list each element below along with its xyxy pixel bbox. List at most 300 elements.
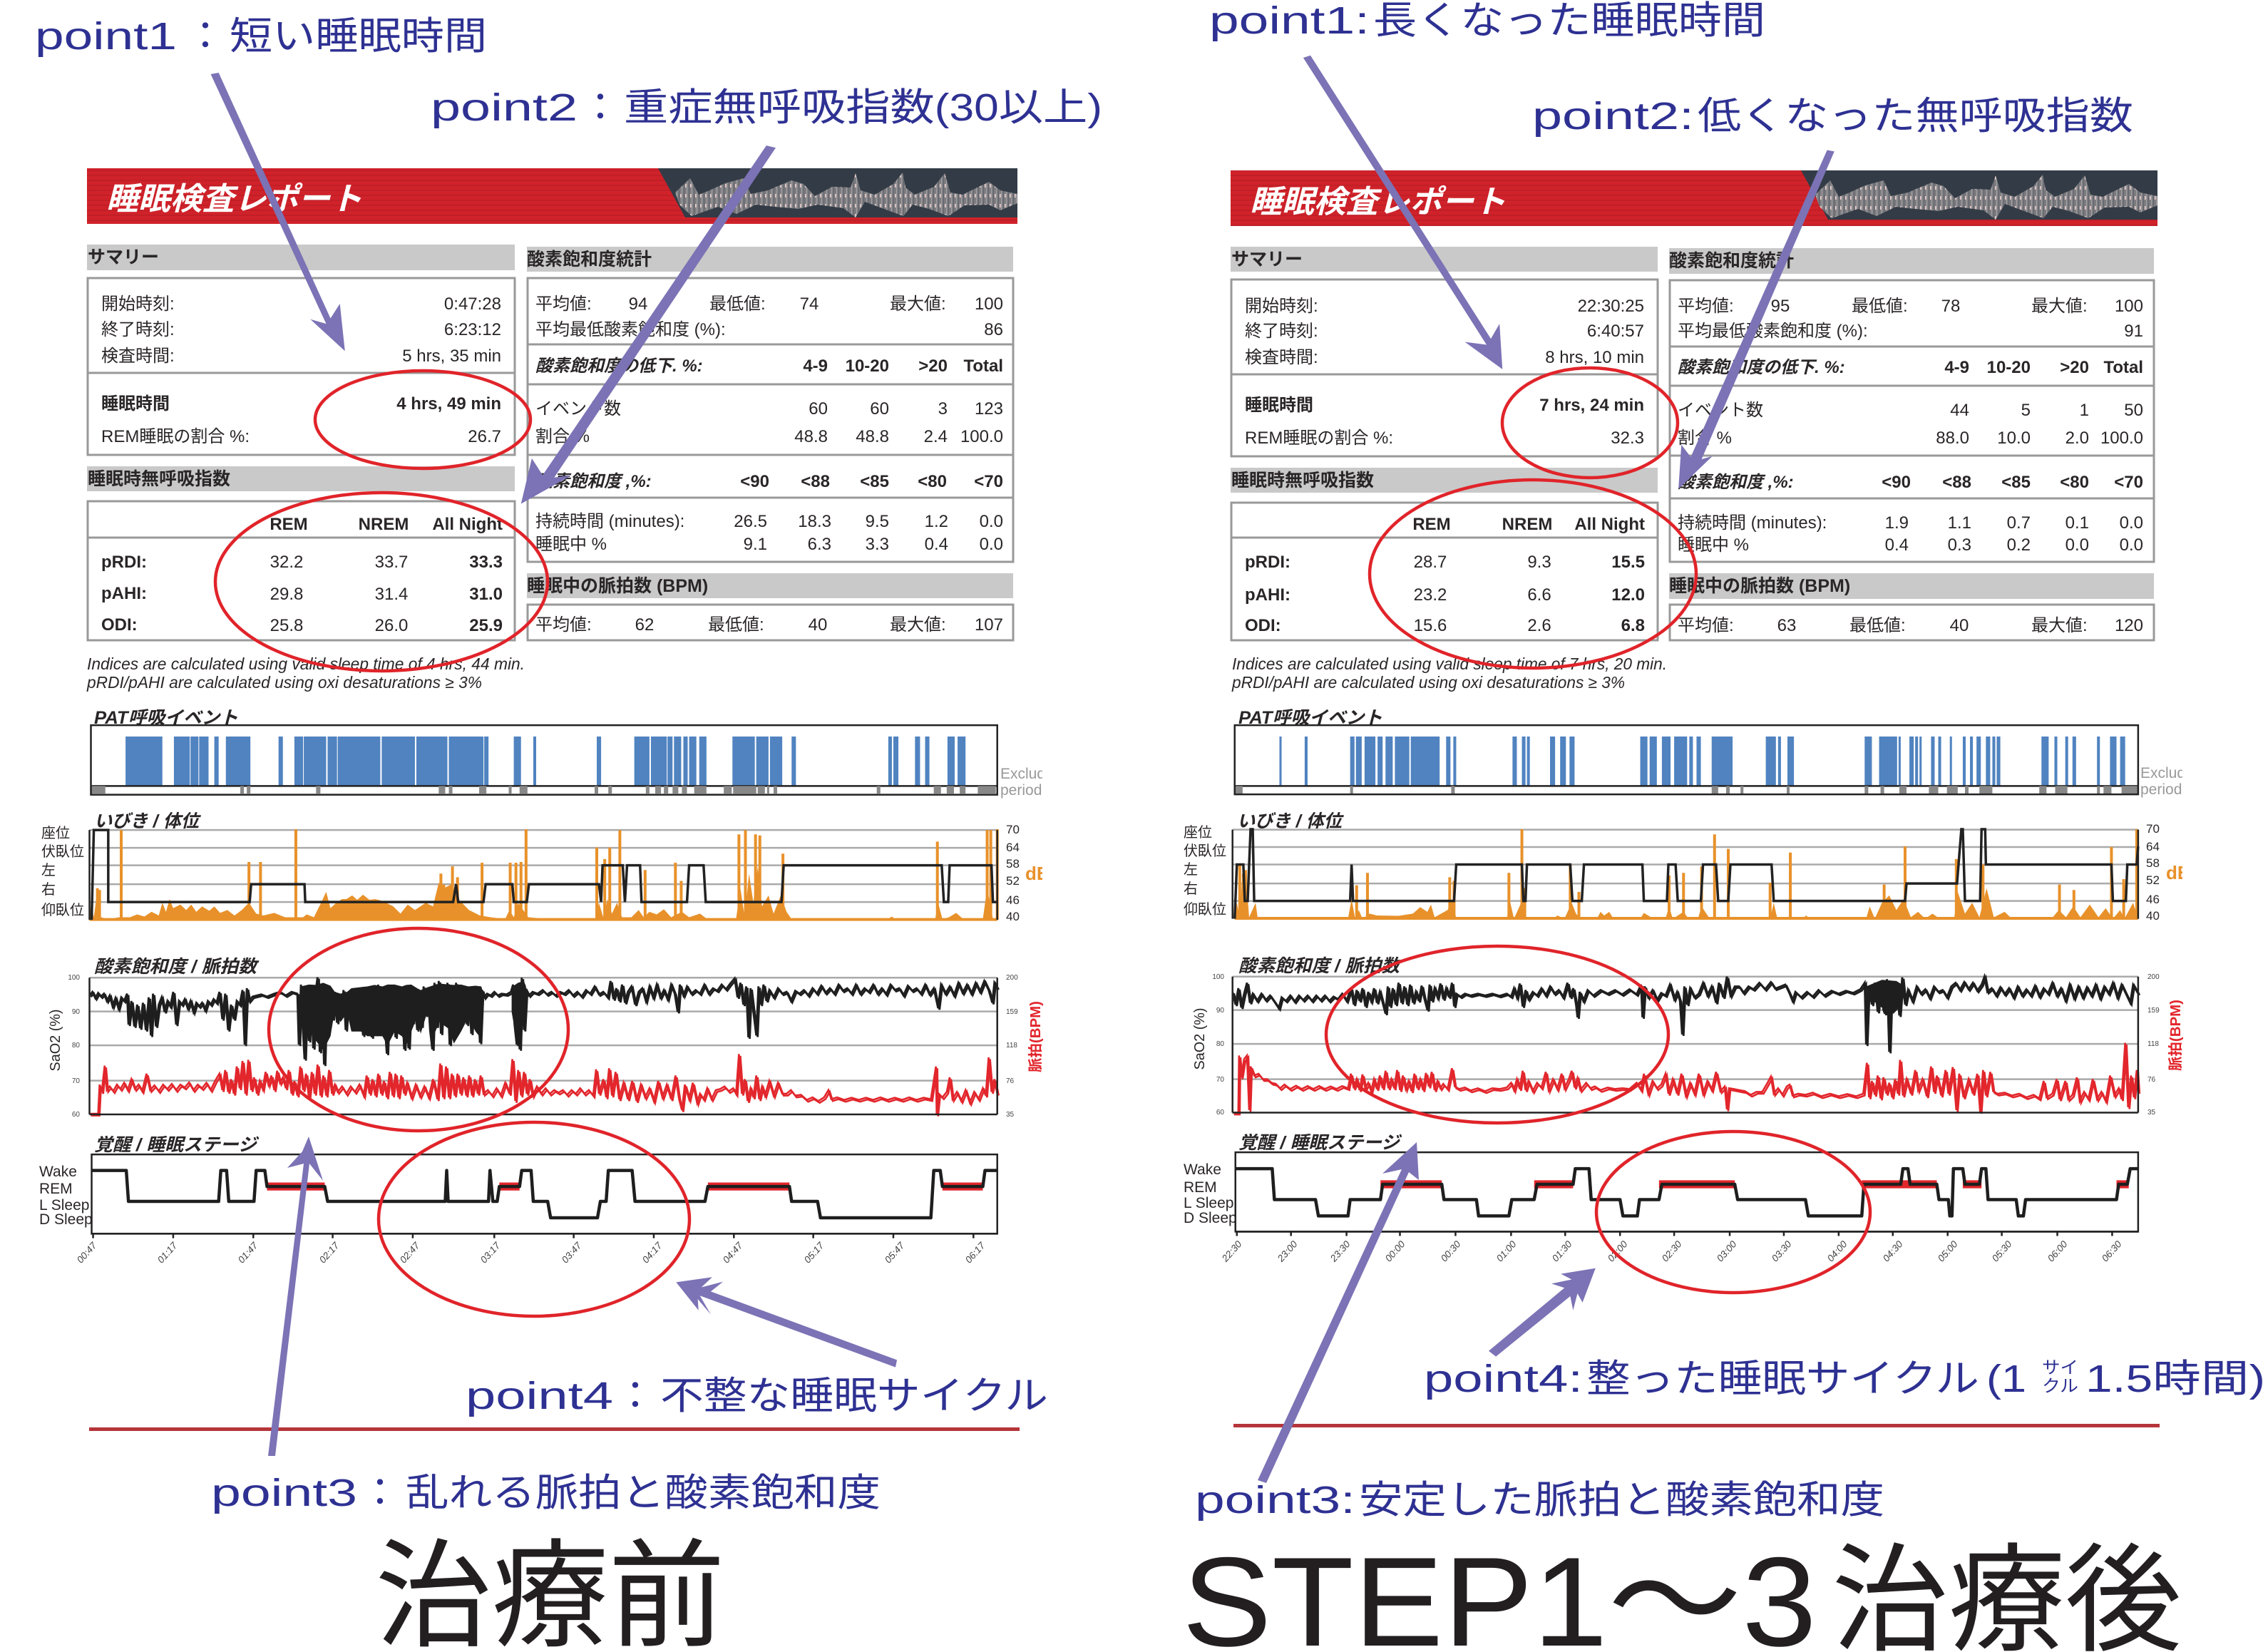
panel: oxygen saturation statistics: 3.3 [866, 535, 889, 554]
panel: oxygen saturation statistics: イベント数 [1678, 401, 1763, 420]
text block: calculation notes: pRDI/pAHI are calculated using oxi desaturations ≥ 3% [1231, 673, 1625, 692]
panel: oxygen saturation statistics: 100 [975, 294, 1003, 314]
chart: oxygen saturation and pulse: 90 [72, 1008, 80, 1016]
panel: apnea index: 31.4 [375, 585, 408, 604]
arrow: left point 4 [676, 1277, 897, 1368]
panel: oxygen saturation statistics: 1.2 [925, 512, 948, 531]
callout: right point 4: 1.5時間) [2085, 1358, 2263, 1400]
chart: wake and sleep stages: REM [39, 1181, 73, 1197]
panel: oxygen saturation statistics: >20 [918, 356, 948, 376]
panel: oxygen saturation statistics: 2.4 [924, 427, 948, 446]
panel: pulse rate during sleep: 40 [809, 615, 827, 635]
panel: summary: 睡眠時間 [1245, 396, 1313, 415]
panel: oxygen saturation statistics: 最低値: [1852, 297, 1908, 316]
chart: wake and sleep stages: L Sleep [39, 1197, 89, 1214]
panel: summary: 検査時間: [101, 347, 175, 366]
panel: oxygen saturation statistics: 0.0 [980, 512, 1003, 531]
panel: apnea index: 25.8 [270, 616, 303, 635]
chart: oxygen saturation and pulse: 酸素飽和度 / 脈拍数 [94, 957, 260, 977]
panel: apnea index: 33.7 [375, 553, 408, 572]
chart: wake and sleep stages: Wake [1184, 1161, 1221, 1178]
chart: wake and sleep stages: 00:30 [1439, 1238, 1463, 1264]
panel: oxygen saturation statistics: 0.7 [2007, 513, 2031, 533]
chart: wake and sleep stages: 04:47 [721, 1240, 745, 1266]
panel: oxygen saturation statistics: 4-9 [803, 356, 828, 376]
panel: oxygen saturation statistics: <90 [740, 472, 769, 491]
panel: oxygen saturation statistics: 0.0 [2120, 535, 2143, 555]
chart: snore and body position: 仰臥位 [1184, 901, 1226, 918]
chart: snore and body position: いびき / 体位 [94, 811, 202, 831]
panel: summary: 7 hrs, 24 min [1539, 396, 1644, 415]
panel: summary: 8 hrs, 10 min [1545, 348, 1644, 367]
chart: oxygen saturation and pulse: 60 [1216, 1109, 1224, 1117]
callout: right point 4: (1 [1986, 1358, 2026, 1400]
panel: oxygen saturation statistics: 48.8 [856, 427, 889, 446]
chart: wake and sleep stages: 22:30 [1219, 1238, 1244, 1264]
chart: wake and sleep stages: 02:30 [1660, 1238, 1684, 1264]
panel: oxygen saturation statistics: <88 [801, 472, 830, 491]
panel: summary [87, 245, 515, 455]
panel: apnea index [1231, 468, 1658, 640]
chart: PAT respiratory events [91, 708, 1062, 799]
panel: apnea index: 9.3 [1527, 553, 1551, 572]
chart: wake and sleep stages: 04:17 [640, 1240, 664, 1266]
chart: wake and sleep stages: 02:17 [317, 1240, 342, 1266]
chart: PAT respiratory events: periods [1000, 782, 1050, 799]
chart: oxygen saturation and pulse [48, 957, 1044, 1119]
panel: oxygen saturation statistics: Total [2103, 358, 2143, 377]
panel: pulse rate during sleep: 平均値: [535, 615, 592, 635]
chart: wake and sleep stages: 00:00 [1383, 1238, 1407, 1264]
callout: right point 2: point2: [1532, 95, 1694, 138]
callout: right point 2: 低くなった無呼吸指数 [1698, 95, 2133, 138]
panel: summary: 検査時間: [1245, 348, 1318, 367]
chart: snore and body position: 52 [1006, 874, 1020, 888]
chart: oxygen saturation and pulse: SaO2 (%) [48, 1010, 63, 1071]
chart: oxygen saturation and pulse: 60 [72, 1111, 80, 1119]
chart: snore and body position [1184, 811, 2191, 923]
panel: pulse rate during sleep: 63 [1777, 616, 1796, 635]
chart: snore and body position: 70 [1006, 823, 1020, 836]
panel: apnea index: 15.5 [1611, 553, 1645, 572]
callout: right point 4: クル [2042, 1377, 2078, 1396]
chart: snore and body position: 46 [1006, 893, 1020, 907]
panel: oxygen saturation statistics: 26.5 [734, 512, 767, 531]
text block: calculation notes: Indices are calculated using valid sleep time of 4 hrs, 44 min. [87, 655, 525, 673]
chart: snore and body position: 58 [1006, 857, 1020, 871]
arrow: left point 3 [268, 1137, 323, 1456]
chart: wake and sleep stages: 06:30 [2100, 1238, 2124, 1264]
panel: oxygen saturation statistics: 10-20 [1987, 358, 2031, 377]
panel: apnea index: pRDI: [1245, 553, 1290, 572]
panel: oxygen saturation statistics: <90 [1882, 473, 1911, 492]
panel: apnea index: 32.2 [270, 553, 303, 572]
chart: wake and sleep stages: 00:47 [75, 1240, 99, 1266]
callout: left point 1 [35, 15, 487, 58]
chart: oxygen saturation and pulse: 90 [1216, 1007, 1224, 1015]
panel: oxygen saturation statistics: 酸素飽和度統計 [1669, 251, 1794, 271]
chart: wake and sleep stages: 23:30 [1328, 1238, 1353, 1264]
panel: oxygen saturation statistics: 9.1 [744, 535, 767, 554]
panel: oxygen saturation statistics: 0.3 [1948, 535, 1971, 555]
callout: right point 1: point1: [1209, 0, 1370, 42]
panel: oxygen saturation statistics: 6.3 [808, 535, 831, 554]
panel: pulse rate during sleep [1669, 573, 2154, 640]
panel: oxygen saturation statistics: 48.8 [794, 427, 828, 446]
chart: snore and body position: 左 [1184, 861, 1198, 878]
callout: left point 2: point2 [431, 86, 578, 129]
annotation: right ellipse on sleep stages [1596, 1132, 1870, 1293]
panel: oxygen saturation statistics: 100.0 [2100, 429, 2143, 448]
panel: apnea index: 12.0 [1611, 585, 1645, 605]
chart: oxygen saturation and pulse: 脈拍(BPM) [1027, 1001, 1044, 1072]
panel: apnea index: NREM [359, 515, 409, 534]
chart: wake and sleep stages: 01:47 [236, 1240, 260, 1266]
chart: oxygen saturation and pulse: 118 [1006, 1042, 1017, 1050]
callout: right point 1: 長くなった睡眠時間 [1373, 0, 1765, 42]
chart: snore and body position: 52 [2146, 873, 2160, 887]
chart: snore and body position: 左 [41, 862, 56, 878]
panel: apnea index: 6.8 [1621, 616, 1645, 635]
chart: oxygen saturation and pulse: 100 [68, 974, 80, 982]
panel: oxygen saturation statistics: 酸素飽和度統計 [527, 250, 652, 270]
panel: oxygen saturation statistics: 0.2 [2007, 535, 2031, 555]
panel: pulse rate during sleep: 40 [1950, 616, 1969, 635]
panel: summary: 26.7 [468, 427, 501, 446]
arrow: left point 2 [521, 145, 776, 504]
panel: oxygen saturation statistics: 0.0 [2066, 535, 2089, 555]
text block: calculation notes [1231, 655, 1667, 692]
chart: wake and sleep stages: 04:00 [1825, 1238, 1849, 1264]
panel: summary: 終了時刻: [1245, 322, 1318, 341]
panel: summary: 6:23:12 [444, 320, 501, 339]
panel: oxygen saturation statistics [1669, 248, 2154, 562]
arrow: left point 1 [211, 73, 345, 351]
arrow: right point 1 [1303, 56, 1502, 369]
panel: summary: 6:40:57 [1587, 322, 1644, 341]
panel: pulse rate during sleep: 最低値: [708, 615, 764, 635]
panel: oxygen saturation statistics: 酸素飽和度 ,%: [535, 472, 652, 491]
callout: left point 2 [431, 86, 1102, 129]
panel: before treatment report [39, 168, 1062, 1431]
annotation: left ellipse on apnea index [215, 493, 548, 671]
panel: oxygen saturation statistics: 0.0 [2120, 513, 2143, 533]
panel: pulse rate during sleep: 平均値: [1678, 616, 1734, 635]
panel: oxygen saturation statistics: 平均値: [535, 294, 592, 314]
panel: summary: サマリー [88, 247, 159, 267]
chart: oxygen saturation and pulse: 35 [2147, 1109, 2156, 1117]
panel: oxygen saturation statistics: 74 [800, 294, 819, 314]
chart: PAT respiratory events: PAT呼吸イベント [1238, 708, 1382, 728]
chart: wake and sleep stages: Wake [39, 1164, 77, 1180]
chart: snore and body position: dB [1025, 863, 1050, 884]
callout: left point 3 [211, 1472, 881, 1514]
arrow: right point 4 [1489, 1268, 1596, 1357]
panel: pulse rate during sleep: 62 [635, 615, 654, 635]
chart: wake and sleep stages: L Sleep [1184, 1195, 1233, 1211]
panel: oxygen saturation statistics: 123 [975, 399, 1003, 419]
chart: oxygen saturation and pulse: 159 [2147, 1007, 2160, 1015]
callout: left point 4 [466, 1375, 1048, 1417]
panel: oxygen saturation statistics: 10.0 [1997, 429, 2031, 448]
panel: apnea index: 29.8 [270, 585, 303, 604]
panel: apnea index: 15.6 [1414, 616, 1447, 635]
panel: oxygen saturation statistics: 100 [2115, 297, 2143, 316]
divider line [89, 1427, 1020, 1431]
panel: oxygen saturation statistics: <70 [2114, 473, 2143, 492]
chart: wake and sleep stages: 03:47 [560, 1240, 584, 1266]
chart: oxygen saturation and pulse: 200 [2147, 973, 2160, 981]
text block: calculation notes [86, 655, 525, 692]
panel: oxygen saturation statistics: 60 [870, 399, 889, 419]
panel: apnea index: All Night [1574, 515, 1645, 534]
panel: apnea index: 2.6 [1527, 616, 1551, 635]
panel: oxygen saturation statistics: <85 [2001, 473, 2031, 492]
chart: snore and body position: 40 [1006, 910, 1020, 923]
chart: wake and sleep stages: 04:30 [1881, 1238, 1905, 1264]
panel: oxygen saturation statistics: 0.4 [925, 535, 948, 554]
chart: wake and sleep stages: 02:47 [398, 1240, 422, 1266]
chart: wake and sleep stages: 06:17 [963, 1240, 987, 1266]
chart: snore and body position: 伏臥位 [1184, 843, 1226, 859]
chart: snore and body position: いびき / 体位 [1237, 811, 1345, 831]
panel: after treatment report [1184, 170, 2202, 1427]
chart: snore and body position: 伏臥位 [41, 843, 84, 860]
chart: oxygen saturation and pulse: 35 [1006, 1111, 1015, 1119]
panel: oxygen saturation statistics: 平均最低酸素飽和度 (%): [1678, 322, 1868, 341]
banner: sleep report: 睡眠検査レポート [106, 182, 362, 217]
panel: oxygen saturation statistics: 酸素飽和度の低下. %: [1678, 358, 1845, 377]
panel: apnea index: 23.2 [1414, 585, 1447, 605]
arrow: right point 3 [1258, 1142, 1419, 1483]
panel: oxygen saturation statistics: 78 [1941, 297, 1960, 316]
chart: oxygen saturation and pulse: 76 [1006, 1077, 1015, 1085]
callout: right point 3: 安定した脈拍と酸素飽和度 [1359, 1479, 1884, 1522]
panel: oxygen saturation statistics: 9.5 [866, 512, 889, 531]
annotation: left ellipse on sleep time [315, 371, 530, 468]
panel: oxygen saturation statistics: イベント数 [535, 399, 621, 419]
panel: summary: 5 hrs, 35 min [402, 347, 501, 366]
chart: oxygen saturation and pulse: 酸素飽和度 / 脈拍数 [1238, 956, 1402, 976]
panel: oxygen saturation statistics: 18.3 [798, 512, 831, 531]
panel: pulse rate during sleep: 最低値: [1849, 616, 1906, 635]
chart: snore and body position: 座位 [41, 825, 70, 841]
annotation: left ellipse on saturation trace [269, 928, 568, 1131]
chart: wake and sleep stages: D Sleep [1184, 1210, 1237, 1226]
chart: wake and sleep stages: 03:00 [1715, 1238, 1739, 1264]
panel: apnea index: ODI: [1245, 616, 1281, 635]
panel: oxygen saturation statistics: 割合 % [1678, 429, 1732, 448]
chart: wake and sleep stages: 06:00 [2046, 1238, 2070, 1264]
chart: wake and sleep stages: 23:00 [1275, 1238, 1300, 1264]
panel: oxygen saturation statistics: 2.0 [2066, 429, 2089, 448]
chart: oxygen saturation and pulse: 80 [72, 1042, 80, 1050]
panel: apnea index: pAHI: [101, 584, 147, 603]
banner: sleep report [1231, 170, 2157, 226]
chart: wake and sleep stages: 01:30 [1550, 1238, 1574, 1264]
annotation: right ellipse on apnea index [1370, 480, 1696, 668]
callout: left point 4: 不整な睡眠サイクル [660, 1375, 1048, 1417]
panel: oxygen saturation statistics: 0.0 [980, 535, 1003, 554]
panel: summary: サマリー [1231, 250, 1303, 270]
panel: oxygen saturation statistics: 60 [809, 399, 828, 419]
callout: right point 4 [1424, 1358, 2263, 1400]
panel: apnea index: 28.7 [1414, 553, 1447, 572]
callout: right point 4: サイ [2042, 1358, 2078, 1377]
chart: wake and sleep stages: REM [1184, 1179, 1217, 1196]
panel: pulse rate during sleep [527, 573, 1013, 640]
panel: apnea index: 睡眠時無呼吸指数 [1231, 471, 1374, 491]
chart: wake and sleep stages: 05:00 [1936, 1238, 1960, 1264]
panel: oxygen saturation statistics: 酸素飽和度 ,%: [1678, 473, 1794, 492]
panel: oxygen saturation statistics: 酸素飽和度の低下. %: [535, 356, 703, 376]
callout: left point 4: point4 [466, 1375, 613, 1417]
chart: snore and body position: dB [2166, 862, 2191, 883]
text block: calculation notes: pRDI/pAHI are calculated using oxi desaturations ≥ 3% [86, 673, 482, 692]
panel: pulse rate during sleep: 睡眠中の脈拍数 (BPM) [1669, 576, 1850, 596]
chart: oxygen saturation and pulse: 脈拍(BPM) [2167, 1000, 2184, 1071]
panel: summary [1231, 247, 1658, 456]
chart: wake and sleep stages: 05:47 [883, 1240, 907, 1266]
panel: oxygen saturation statistics: 最大値: [2031, 297, 2088, 316]
panel: summary: 22:30:25 [1578, 297, 1644, 316]
panel: oxygen saturation statistics: 0.1 [2066, 513, 2089, 533]
chart: PAT respiratory events [1235, 708, 2202, 798]
chart: snore and body position: 64 [1006, 841, 1020, 854]
chart: wake and sleep stages [39, 1135, 997, 1266]
arrow: right point 2 [1678, 150, 1834, 489]
panel: apnea index: 25.9 [469, 616, 503, 635]
chart: PAT respiratory events: PAT呼吸イベント [94, 708, 238, 728]
panel: oxygen saturation statistics: Total [963, 356, 1003, 376]
callout: left point 4: ： [616, 1375, 655, 1417]
panel: oxygen saturation statistics: 86 [984, 320, 1003, 339]
callout: left point 2: ： [581, 86, 620, 129]
panel: oxygen saturation statistics [527, 247, 1013, 562]
panel: apnea index [87, 466, 515, 640]
chart: oxygen saturation and pulse: 76 [2147, 1076, 2156, 1084]
callout: right point 2 [1532, 95, 2133, 138]
panel: summary: 睡眠時間 [101, 394, 170, 414]
callout: left point 3: ： [361, 1472, 399, 1514]
chart: oxygen saturation and pulse: 118 [2147, 1040, 2159, 1048]
panel: oxygen saturation statistics: 91 [2124, 322, 2143, 341]
chart: snore and body position: 46 [2146, 893, 2160, 906]
chart: oxygen saturation and pulse: 200 [1006, 974, 1018, 982]
panel: apnea index: pRDI: [101, 553, 147, 572]
chart: wake and sleep stages: 01:00 [1494, 1238, 1519, 1264]
panel: apnea index: ODI: [101, 615, 138, 635]
chart: snore and body position: 座位 [1184, 824, 1212, 841]
callout: right point 4: 整った睡眠サイクル [1586, 1358, 1979, 1400]
panel: apnea index: NREM [1502, 515, 1552, 534]
chart: snore and body position: 右 [1184, 881, 1198, 897]
chart: wake and sleep stages: 03:17 [478, 1240, 503, 1266]
panel: apnea index: REM [270, 515, 308, 534]
callout: left point 2: 重症無呼吸指数(30以上) [624, 86, 1102, 129]
panel: oxygen saturation statistics: 95 [1771, 297, 1790, 316]
callout: right point 1 [1209, 0, 1765, 42]
panel: summary: REM睡眠の割合 %: [101, 427, 250, 446]
chart: snore and body position: 右 [41, 881, 56, 898]
chart: wake and sleep stages: 覚醒 / 睡眠ステージ [1238, 1133, 1402, 1153]
panel: oxygen saturation statistics: <80 [2060, 473, 2089, 492]
chart: snore and body position: 仰臥位 [41, 902, 84, 918]
callout: left point 3: point3 [211, 1472, 357, 1514]
panel: summary: 終了時刻: [101, 320, 175, 339]
panel: oxygen saturation statistics: <85 [860, 472, 889, 491]
chart: oxygen saturation and pulse: 159 [1006, 1008, 1018, 1016]
panel: summary: 4 hrs, 49 min [396, 394, 501, 414]
chart: oxygen saturation and pulse [1192, 956, 2184, 1117]
callout: right point 3 [1195, 1479, 1884, 1522]
panel: oxygen saturation statistics: <70 [974, 472, 1003, 491]
annotation: right ellipse on saturation trace [1326, 946, 1668, 1123]
panel: oxygen saturation statistics: 88.0 [1936, 429, 1969, 448]
banner: sleep report: 睡眠検査レポート [1250, 185, 1506, 220]
callout: left point 1: point1 [35, 15, 177, 58]
panel: oxygen saturation statistics: 0.4 [1885, 535, 1909, 555]
text block: calculation notes: Indices are calculated using valid sleep time of 7 hrs, 20 min. [1232, 655, 1667, 673]
callout: right point 4: point4: [1424, 1358, 1583, 1400]
panel: summary: 開始時刻: [1245, 297, 1318, 316]
chart: snore and body position: 40 [2146, 909, 2160, 923]
panel: oxygen saturation statistics: 持続時間 (minutes): [1678, 513, 1827, 533]
chart: snore and body position: 64 [2146, 840, 2160, 853]
chart: snore and body position: 58 [2146, 856, 2160, 870]
panel: pulse rate during sleep: 睡眠中の脈拍数 (BPM) [527, 576, 708, 596]
panel: oxygen saturation statistics: 4-9 [1944, 358, 1969, 377]
panel: summary: 0:47:28 [444, 294, 501, 314]
chart: wake and sleep stages: 03:30 [1770, 1238, 1794, 1264]
panel: oxygen saturation statistics: 10-20 [846, 356, 889, 376]
callout: left point 1: 短い睡眠時間 [230, 15, 487, 58]
chart: oxygen saturation and pulse: 70 [1216, 1076, 1224, 1084]
chart: wake and sleep stages [1184, 1133, 2138, 1264]
chart: wake and sleep stages: 覚醒 / 睡眠ステージ [94, 1135, 260, 1155]
panel: apnea index: 睡眠時無呼吸指数 [88, 469, 230, 489]
chart: oxygen saturation and pulse: SaO2 (%) [1192, 1008, 1208, 1069]
chart: snore and body position: 70 [2146, 822, 2160, 836]
panel: oxygen saturation statistics: 1.1 [1948, 513, 1971, 533]
banner: sleep report [87, 168, 1017, 224]
panel: oxygen saturation statistics: 最低値: [709, 294, 766, 314]
panel: summary: 32.3 [1611, 429, 1644, 448]
panel: summary: 開始時刻: [101, 294, 175, 314]
panel: oxygen saturation statistics: 睡眠中 % [1678, 535, 1749, 555]
panel: oxygen saturation statistics: 3 [938, 399, 948, 419]
chart: oxygen saturation and pulse: 70 [72, 1077, 80, 1085]
panel: oxygen saturation statistics: 平均最低酸素飽和度 (%): [535, 320, 726, 339]
chart: PAT respiratory events: periods [2140, 781, 2190, 798]
chart: snore and body position [41, 811, 1050, 923]
panel: oxygen saturation statistics: 94 [629, 294, 647, 314]
panel: oxygen saturation statistics: 割合 % [535, 427, 590, 446]
panel: apnea index: pAHI: [1245, 585, 1290, 605]
panel: oxygen saturation statistics: 1.9 [1885, 513, 1909, 533]
panel: apnea index: 33.3 [469, 553, 503, 572]
panel: apnea index: 31.0 [469, 585, 503, 604]
callout: left point 3: 乱れる脈拍と酸素飽和度 [406, 1472, 881, 1514]
panel: oxygen saturation statistics: 100.0 [960, 427, 1003, 446]
panel: oxygen saturation statistics: 5 [2021, 401, 2031, 420]
chart: oxygen saturation and pulse: 100 [1212, 973, 1224, 981]
chart: oxygen saturation and pulse: 80 [1216, 1040, 1224, 1048]
callout: left point 1: ： [186, 15, 225, 58]
panel: oxygen saturation statistics: 1 [2080, 401, 2089, 420]
annotation: left ellipse on sleep stages [379, 1122, 689, 1316]
chart: wake and sleep stages: D Sleep [39, 1211, 93, 1228]
